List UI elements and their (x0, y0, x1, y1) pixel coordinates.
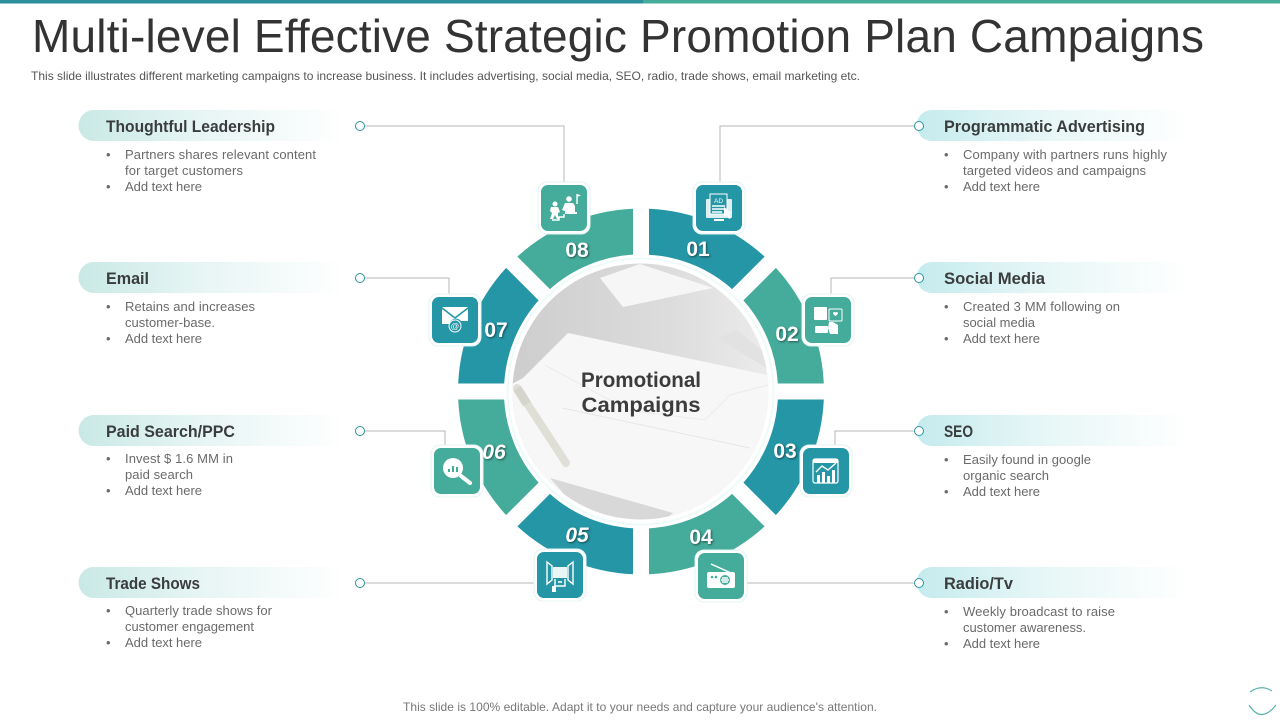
panel: paid search: paid search (125, 467, 193, 482)
title: Multi-level Effective Strategic Promotion Plan Campaigns (32, 10, 1204, 62)
panel: radio tv: • (944, 604, 949, 619)
segment 07 with email icon: 07 (484, 319, 508, 342)
panel: social media (831, 262, 1190, 346)
top accent bar (0, 0, 1280, 4)
panel: social media: Add text here (963, 331, 1040, 346)
panel: seo: Easily found in google (963, 452, 1091, 467)
panel: thoughtful leadership: Add text here (125, 179, 202, 194)
panel: programmatic advertising (720, 110, 1190, 194)
segment 02 with social media icon: 02 (775, 323, 799, 346)
center photo circle (506, 258, 774, 526)
segment 08 with leadership icon: 08 (565, 239, 589, 262)
panel: thoughtful leadership: for target customers (125, 163, 244, 178)
panel: social media: • (944, 299, 949, 314)
panel: thoughtful leadership (78, 110, 564, 194)
panel: seo: Add text here (963, 484, 1040, 499)
segment 01 with ad icon: 01 (686, 238, 710, 261)
segment 05 with trade show booth icon (517, 494, 633, 601)
panel: seo: • (944, 452, 949, 467)
panel: seo: SEO (944, 422, 973, 441)
panel: trade shows: • (106, 635, 111, 650)
panel: trade shows: customer engagement (125, 619, 254, 634)
panel: thoughtful leadership: • (106, 179, 111, 194)
panel: radio tv (746, 567, 1190, 651)
segment 01 with ad icon (649, 182, 765, 289)
segment 06 with search icon: 06 (482, 441, 506, 464)
segment 04 with radio icon (626, 470, 765, 608)
panel: trade shows: Add text here (125, 635, 202, 650)
panel: social media: social media (963, 315, 1036, 330)
segment 03 with chart icon (743, 400, 852, 515)
segment 03 with chart icon: 03 (773, 440, 797, 463)
panel: paid search: Add text here (125, 483, 202, 498)
panel: email: Email (106, 269, 149, 288)
panel: seo: organic search (963, 468, 1049, 483)
panel: email: Retains and increases (125, 299, 256, 314)
segment 04 with radio icon: 04 (689, 526, 713, 549)
panel: thoughtful leadership: Thoughtful Leadership (106, 117, 275, 136)
panel: paid search: Paid Search/PPC (106, 422, 235, 441)
segment 05 with trade show booth icon: 05 (565, 524, 589, 547)
logo mark (1249, 688, 1276, 714)
panel: trade shows: • (106, 603, 111, 618)
segment 07 with email icon: @ (451, 321, 459, 331)
center label (581, 369, 701, 417)
panel: email: • (106, 331, 111, 346)
panel: email: Add text here (125, 331, 202, 346)
segment 07 with email icon (429, 268, 539, 384)
panel: programmatic advertising: Programmatic Advertising (944, 117, 1145, 136)
panel: radio tv: • (944, 636, 949, 651)
panel: programmatic advertising: • (944, 147, 949, 162)
panel: seo: • (944, 484, 949, 499)
panel: social media: Created 3 MM following on (963, 299, 1120, 314)
panel: paid search: • (106, 451, 111, 466)
footer note: This slide is 100% editable. Adapt it to your needs and capture your audience's attention. (403, 700, 877, 714)
panel: radio tv: customer awareness. (963, 620, 1086, 635)
segment 08 with leadership icon (517, 175, 656, 313)
center label: Campaigns (582, 394, 700, 417)
segment 01 with ad icon: AD (714, 198, 723, 205)
panel: social media: Social Media (944, 269, 1046, 288)
panel: email: customer-base. (125, 315, 215, 330)
panel: radio tv: Weekly broadcast to raise (963, 604, 1115, 619)
panel: paid search (78, 415, 445, 498)
panel: programmatic advertising: targeted videos and campaigns (963, 163, 1146, 178)
segment 02 with social media icon (719, 268, 858, 406)
panel: trade shows: Trade Shows (106, 574, 200, 593)
panel: paid search: • (106, 483, 111, 498)
panel: radio tv: Add text here (963, 636, 1040, 651)
panel: email: • (106, 299, 111, 314)
panel: radio tv: Radio/Tv (944, 574, 1014, 593)
panel: trade shows: Quarterly trade shows for (125, 603, 273, 618)
panel: thoughtful leadership: • (106, 147, 111, 162)
panel: seo (835, 415, 1190, 499)
subtitle: This slide illustrates different marketing campaigns to increase business. It includes advertising, social media, SEO, radio, trade shows, email marketing etc. (31, 69, 860, 83)
segment 06 with search icon (424, 377, 563, 515)
center label: Promotional (581, 369, 701, 392)
panel: thoughtful leadership: Partners shares relevant content (125, 147, 316, 162)
panel: paid search: Invest $ 1.6 MM in (125, 451, 233, 466)
panel: social media: • (944, 331, 949, 346)
panel: programmatic advertising: Company with partners runs highly (963, 147, 1168, 162)
panel: programmatic advertising: • (944, 179, 949, 194)
panel: trade shows (78, 567, 537, 650)
panel: email (78, 262, 449, 346)
panel: programmatic advertising: Add text here (963, 179, 1040, 194)
